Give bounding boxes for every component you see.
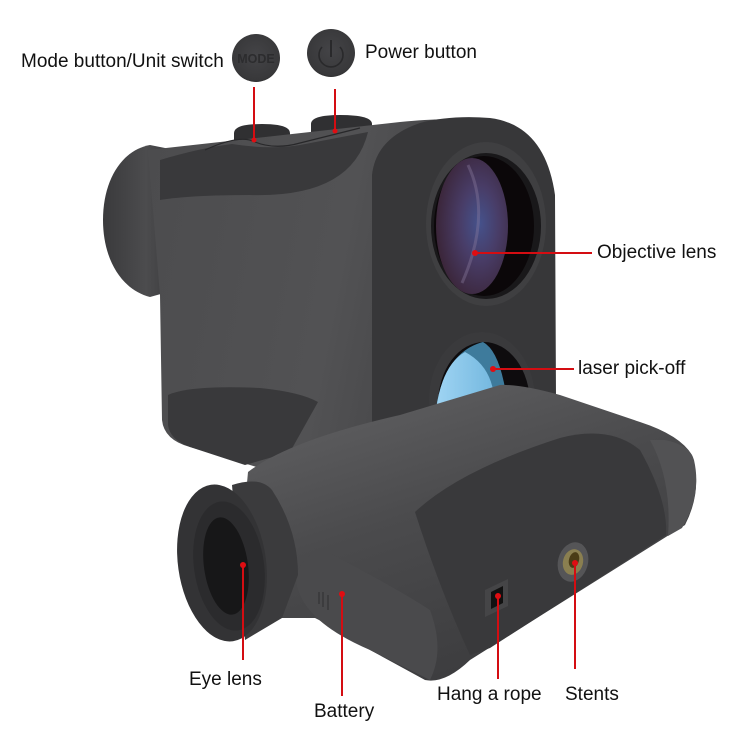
tripod mount [553, 539, 593, 585]
leader: pick-off [490, 366, 574, 372]
right end cap [650, 440, 696, 536]
leader: power [332, 89, 338, 134]
label: eye lens: Eye lens [189, 669, 262, 690]
leader lines [240, 87, 592, 696]
label: power button: Power button [365, 42, 477, 63]
label: battery: Battery [314, 701, 375, 722]
front bezel [372, 117, 556, 440]
textured grip upper [160, 132, 368, 200]
icon: power button [307, 29, 355, 77]
panel: rear rangefinder body [103, 115, 556, 480]
label: stents: Stents [565, 684, 619, 705]
icon: mode button [232, 34, 280, 82]
laser pick-off lens [429, 332, 535, 468]
leader: rope [495, 593, 501, 679]
rope slot [485, 579, 508, 617]
label: laser pick-off: laser pick-off [578, 358, 686, 379]
panel: front rangefinder body [167, 385, 696, 681]
eyepiece [103, 145, 175, 297]
label: mode button: Mode button/Unit switch [21, 51, 224, 72]
battery cover [296, 548, 438, 680]
leader: mode [252, 87, 256, 142]
leader: stents [572, 560, 578, 669]
leader: objective [472, 250, 592, 256]
top buttons [234, 124, 290, 145]
main housing [148, 119, 500, 480]
eyecup [167, 479, 298, 647]
textured grip lower [168, 387, 318, 465]
leader: battery [339, 591, 345, 696]
textured grip [415, 434, 666, 655]
objective lens [426, 142, 546, 306]
label: hang a rope: Hang a rope [437, 684, 542, 705]
label: objective lens: Objective lens [597, 242, 716, 263]
icon: mode button: MODE [237, 52, 275, 66]
leader: eye lens [240, 562, 246, 660]
